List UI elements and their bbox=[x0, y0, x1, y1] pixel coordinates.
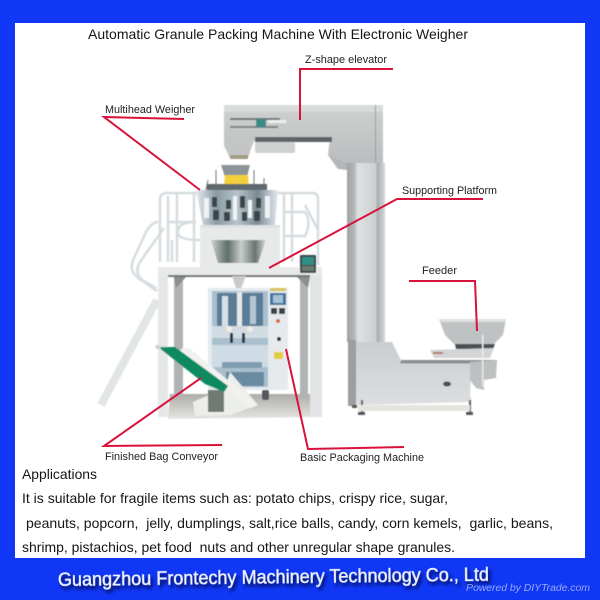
callout: Finished Bag Conveyor: Finished Bag Conveyor bbox=[105, 451, 218, 463]
callout: Finished Bag Conveyor bbox=[104, 378, 222, 463]
applications text: It is suitable for fragile items such as: potato chips, crispy rice, sugar, bbox=[22, 490, 448, 506]
callout: Supporting Platform: Supporting Platform bbox=[402, 185, 497, 197]
applications text bbox=[22, 466, 553, 555]
callout: Z-shape elevator bbox=[300, 54, 393, 120]
multihead weigher bbox=[196, 165, 280, 291]
floor shadow bbox=[168, 394, 312, 419]
callout: Feeder bbox=[409, 265, 477, 331]
callout: Feeder: Feeder bbox=[422, 265, 457, 277]
basic packaging machine bbox=[208, 288, 288, 400]
z-shape elevator bbox=[224, 105, 473, 415]
stairs bbox=[101, 300, 157, 405]
control panel bbox=[300, 255, 316, 273]
title: Automatic Granule Packing Machine With Electronic Weigher bbox=[88, 26, 468, 42]
platform railing and stairs bbox=[101, 193, 318, 405]
platform frame bbox=[158, 267, 322, 417]
callout: Multihead Weigher bbox=[104, 104, 200, 190]
applications text: shrimp, pistachios, pet food nuts and other unregular shape granules. bbox=[22, 539, 455, 555]
callout: Basic Packaging Machine bbox=[286, 349, 424, 464]
callout: Z-shape elevator: Z-shape elevator bbox=[305, 54, 387, 66]
callout: Multihead Weigher: Multihead Weigher bbox=[105, 104, 195, 116]
applications text: peanuts, popcorn, jelly, dumplings, salt,rice balls, candy, corn kemels, garlic, beans, bbox=[26, 515, 553, 531]
applications text: Applications bbox=[22, 466, 97, 482]
callout: Basic Packaging Machine: Basic Packaging Machine bbox=[300, 452, 424, 464]
footer company name: Guangzhou Frontechy Machinery Technology Co., Ltd bbox=[58, 565, 489, 591]
callout: Supporting Platform bbox=[269, 185, 497, 268]
illustration: packing machine bbox=[101, 105, 506, 419]
finished bag conveyor bbox=[155, 345, 258, 416]
watermark: Powered by DIYTrade.com bbox=[466, 582, 590, 594]
elevator feet bbox=[352, 400, 473, 415]
feeder bbox=[401, 319, 506, 390]
